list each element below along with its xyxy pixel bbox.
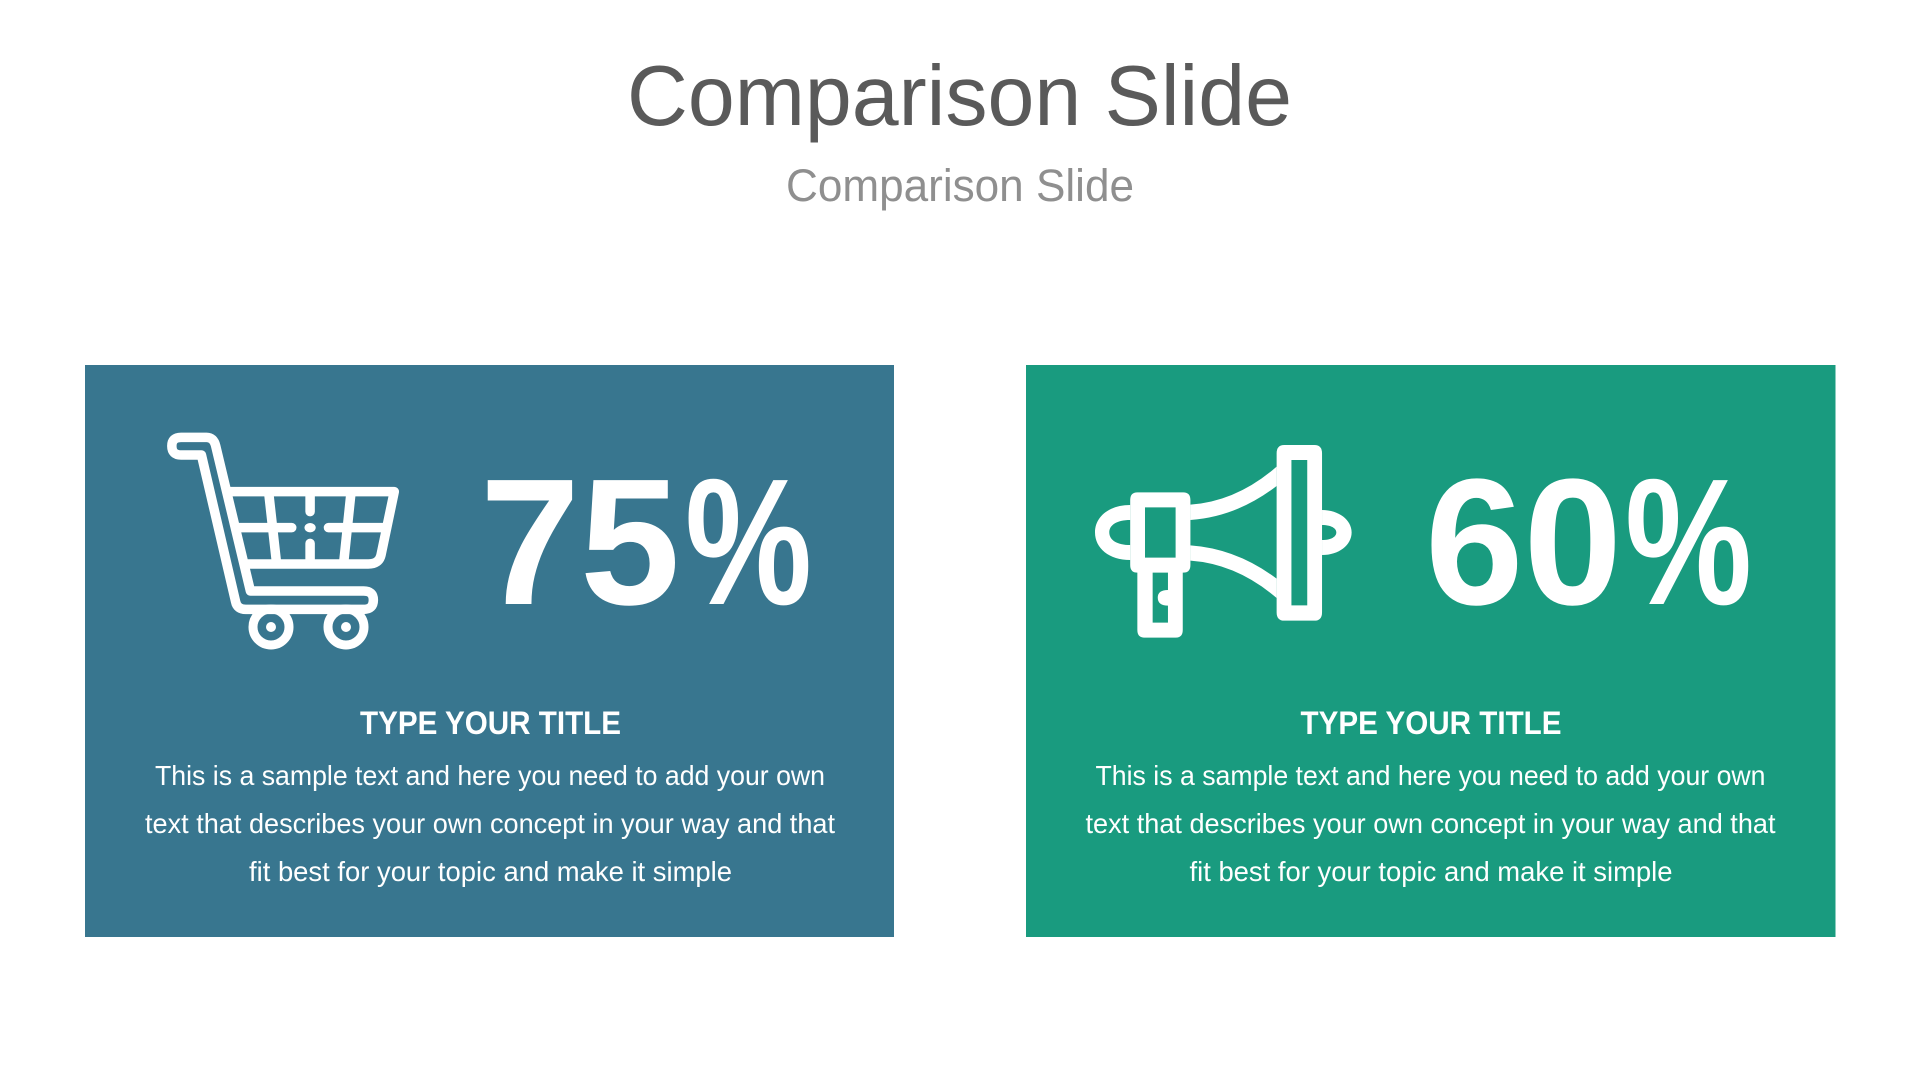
title: Comparison Slide bbox=[627, 49, 1292, 144]
card body text bbox=[1086, 760, 1776, 887]
card background bbox=[1026, 365, 1836, 937]
card body text: fit best for your topic and make it simple bbox=[249, 856, 732, 887]
card body text: This is a sample text and here you need to add your own bbox=[1096, 760, 1766, 791]
card title: TYPE YOUR TITLE bbox=[360, 705, 621, 741]
stat: 60%: 60 bbox=[1425, 442, 1622, 643]
card body text: text that describes your own concept in your way and that bbox=[1086, 808, 1776, 839]
subtitle: Comparison Slide bbox=[786, 160, 1134, 211]
stat: 60%: % bbox=[1625, 442, 1752, 643]
stat: 60% bbox=[1425, 442, 1752, 643]
panel: right green card bbox=[1026, 365, 1836, 937]
card body text: This is a sample text and here you need to add your own bbox=[155, 760, 825, 791]
card body text: text that describes your own concept in your way and that bbox=[145, 808, 835, 839]
icon: megaphone bbox=[1095, 445, 1352, 638]
card title: TYPE YOUR TITLE bbox=[1300, 705, 1562, 741]
card body text: fit best for your topic and make it simple bbox=[1190, 856, 1672, 887]
icon: shopping cart bbox=[172, 437, 394, 645]
stat: 75%: 75 bbox=[480, 442, 680, 643]
stat: 75% bbox=[480, 442, 812, 643]
stat: 75%: % bbox=[685, 442, 812, 643]
card background bbox=[85, 365, 894, 937]
panel: left blue card bbox=[85, 365, 894, 937]
card body text bbox=[145, 760, 835, 887]
